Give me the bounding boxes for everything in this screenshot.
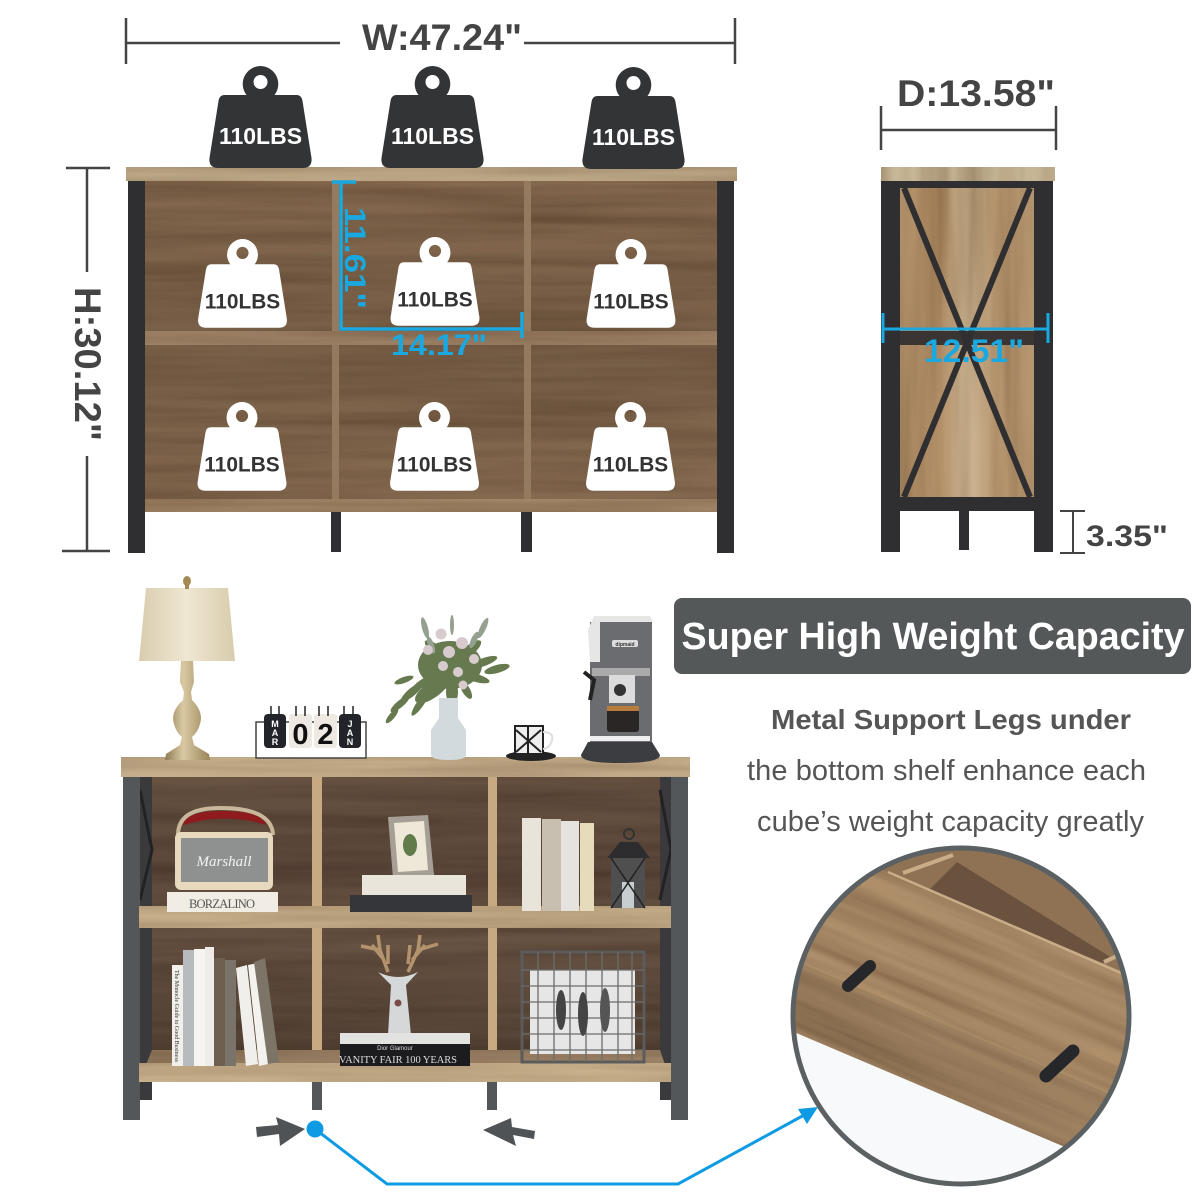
leg height dimension xyxy=(1060,511,1168,553)
cube inner dimensions: 11.61" xyxy=(338,207,371,309)
shelf unit, side view xyxy=(881,167,1055,552)
inner depth dimension xyxy=(883,313,1048,369)
description text: the bottom shelf enhance each xyxy=(747,755,1146,787)
book under radio: BORZALINO xyxy=(189,897,255,911)
espresso machine: dipmaid xyxy=(615,642,635,648)
flip calendar: 0 xyxy=(292,719,309,751)
weight capacity markers, top: 110LBS xyxy=(592,124,675,150)
description text: Metal Support Legs under xyxy=(771,704,1131,735)
weight capacity markers, cubes xyxy=(198,237,675,491)
lantern xyxy=(607,829,650,908)
shelf unit, front view xyxy=(126,167,737,553)
stacked magazines: VANITY FAIR 100 YEARS xyxy=(339,1055,457,1066)
table lamp xyxy=(139,576,235,760)
height dimension: H:30.12" xyxy=(67,287,108,441)
weight capacity markers, cubes: 110LBS xyxy=(397,454,472,477)
width dimension: W:47.24" xyxy=(362,17,522,58)
vase with flowers xyxy=(384,615,511,760)
flip calendar: J xyxy=(347,719,353,729)
weight capacity markers, cubes: 110LBS xyxy=(593,454,668,477)
upright books xyxy=(522,818,594,911)
lower left books: The Monocle Guide to Good Business xyxy=(173,970,179,1063)
weight capacity markers, cubes: 110LBS xyxy=(205,291,280,314)
side dimension diagram xyxy=(881,73,1168,553)
cube inner dimensions xyxy=(332,182,522,362)
inner depth dimension: 12.51" xyxy=(924,333,1024,369)
callout heading badge: Super High Weight Capacity xyxy=(682,616,1184,658)
weight capacity markers, cubes: 110LBS xyxy=(397,289,473,312)
callout heading badge xyxy=(674,598,1191,674)
flip calendar: R xyxy=(272,737,279,747)
description text: cube’s weight capacity greatly xyxy=(757,806,1144,838)
flip calendar: A xyxy=(272,728,279,738)
width dimension xyxy=(126,17,735,64)
wire basket with pillow xyxy=(522,952,644,1062)
weight capacity markers, top: 110LBS xyxy=(391,123,474,149)
height dimension xyxy=(62,168,110,551)
book under radio xyxy=(167,892,278,912)
flip calendar: 2 xyxy=(317,719,334,751)
left support peg xyxy=(848,966,870,986)
depth dimension: D:13.58" xyxy=(897,73,1055,114)
depth dimension xyxy=(881,73,1056,150)
radio: Marshall xyxy=(195,854,252,870)
flip calendar: A xyxy=(347,728,354,738)
radio xyxy=(175,808,273,890)
espresso machine xyxy=(581,616,660,763)
weight capacity markers, top: 110LBS xyxy=(219,123,302,149)
flip calendar: N xyxy=(347,737,353,747)
weight capacity markers, cubes: 110LBS xyxy=(593,291,669,314)
weight capacity markers, top xyxy=(209,66,685,169)
styled shelf unit photo xyxy=(121,576,690,1120)
description text xyxy=(747,704,1146,838)
flip calendar: M xyxy=(271,719,279,729)
stacked magazines xyxy=(339,1033,470,1066)
picture frame and books xyxy=(350,815,472,912)
right pointer arrow xyxy=(483,1118,535,1146)
cube inner dimensions: 14.17" xyxy=(391,329,487,362)
lower left books xyxy=(172,947,279,1066)
weight capacity markers, cubes: 110LBS xyxy=(204,454,280,477)
deer head ornament xyxy=(361,935,438,1038)
left pointer arrow xyxy=(256,1117,305,1146)
flip calendar xyxy=(256,706,366,758)
leg height dimension: 3.35" xyxy=(1086,520,1168,553)
stacked magazines: Dior Glamour xyxy=(377,1046,413,1052)
right support peg xyxy=(1046,1051,1073,1076)
shelf unit structure xyxy=(121,757,690,1120)
blue connector to detail xyxy=(306,1107,818,1184)
front dimension diagram xyxy=(62,17,737,553)
cup and saucer xyxy=(506,726,556,761)
detail magnifier: under-shelf support legs xyxy=(790,846,1132,1186)
